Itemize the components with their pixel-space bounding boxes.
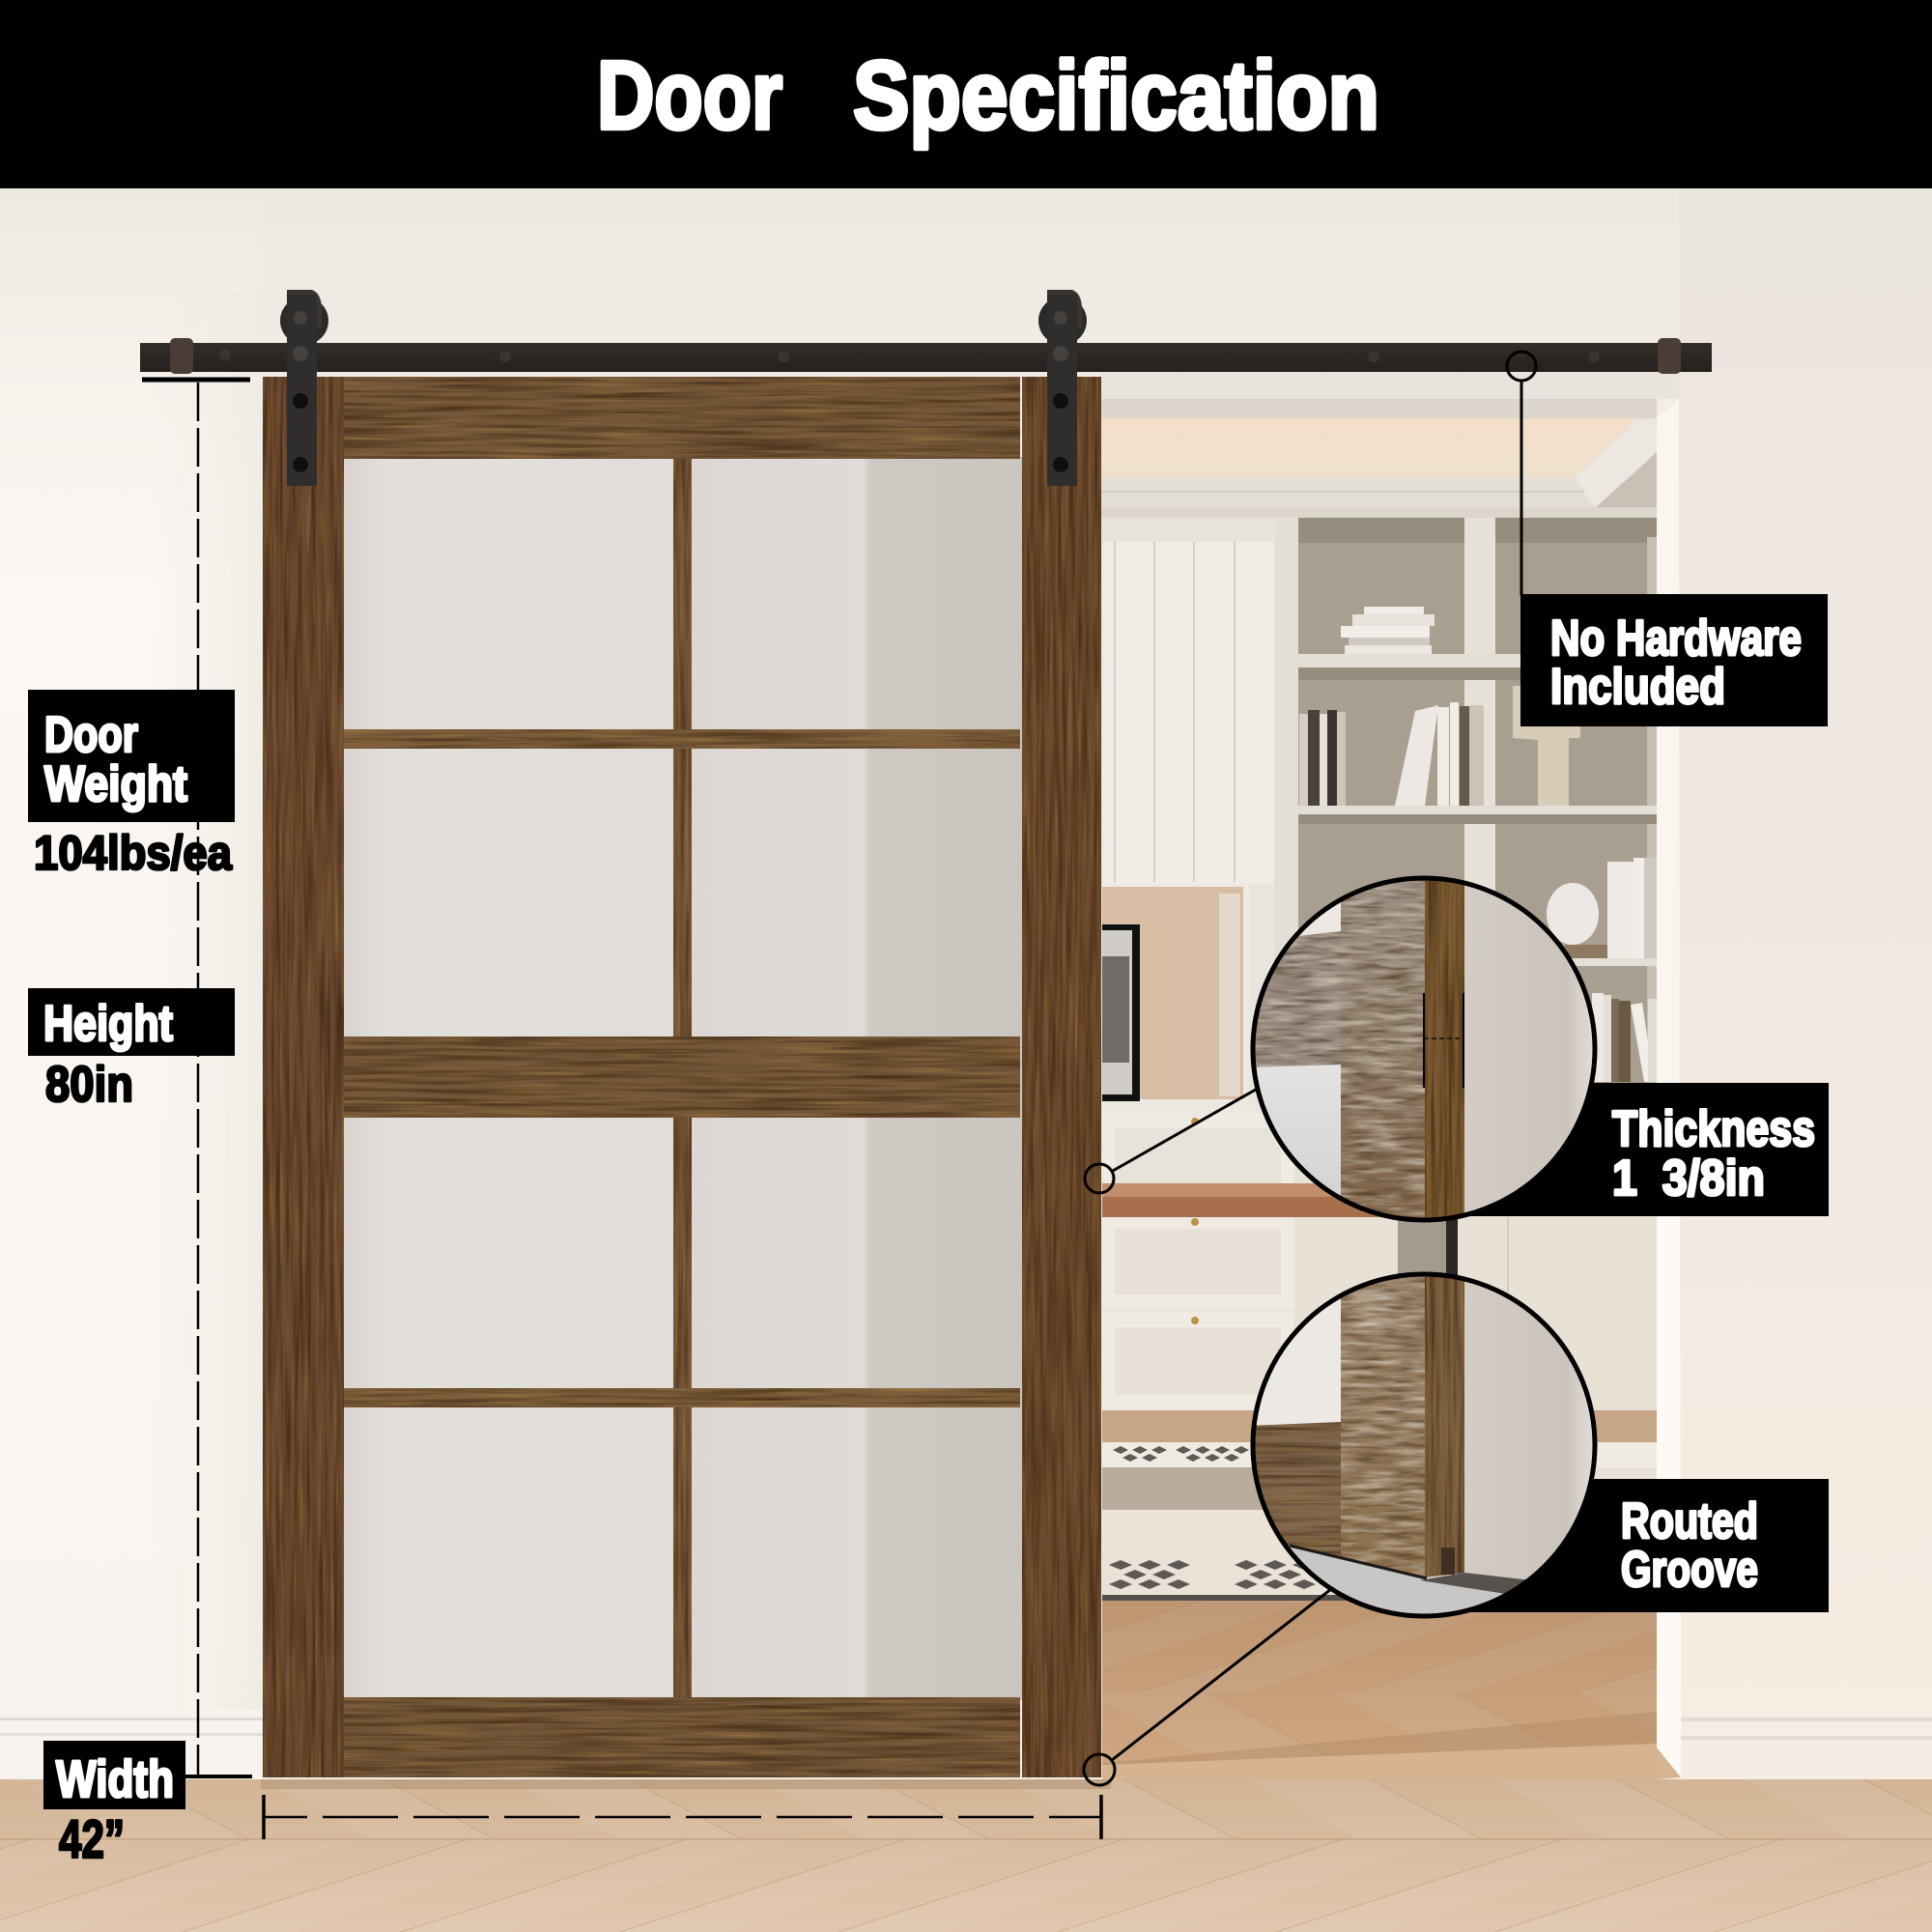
routed groove notch bbox=[1441, 1548, 1455, 1575]
glass panes bbox=[344, 457, 1022, 1700]
header bar bbox=[0, 0, 1932, 188]
opening reveal bbox=[1657, 399, 1681, 1779]
sliding rail hardware bbox=[140, 290, 1712, 486]
detail circle: routed groove bbox=[1246, 1265, 1604, 1623]
back floor foreground bbox=[1102, 1601, 1657, 1777]
right hanger bbox=[1038, 290, 1087, 486]
rail bolts bbox=[219, 349, 1600, 362]
label: height: Height bbox=[43, 996, 173, 1052]
crown moulding bbox=[1101, 478, 1594, 507]
value: width: 42” bbox=[59, 1808, 125, 1869]
label: no hardware included bbox=[1520, 594, 1828, 726]
label: routed groove bbox=[1468, 1479, 1829, 1612]
title bbox=[597, 42, 1379, 150]
thickness measure marks bbox=[1423, 993, 1425, 1088]
lit ceiling cove bbox=[1101, 418, 1637, 478]
cabinet drawers and desk bbox=[1102, 1101, 1295, 1115]
label: no hardware included: No Hardware bbox=[1550, 611, 1802, 667]
sculpture bbox=[1513, 686, 1580, 806]
room interior seen through opening bbox=[1101, 372, 1679, 1779]
label: no hardware included: Included bbox=[1550, 659, 1725, 715]
rug diamond clusters bbox=[1109, 1446, 1316, 1589]
bookcase bbox=[1274, 518, 1657, 1126]
label: thickness: 1 3/8in bbox=[1612, 1151, 1765, 1207]
label: thickness bbox=[1468, 1083, 1829, 1216]
left hanger bbox=[280, 290, 328, 486]
detail circle: thickness bbox=[1246, 869, 1604, 1227]
front floor bbox=[0, 1779, 1932, 1932]
beadboard wall bbox=[1102, 518, 1274, 884]
label: door weight: Weight bbox=[44, 756, 187, 812]
back floor bbox=[1102, 1410, 1657, 1443]
header casing bbox=[1101, 372, 1679, 399]
value: door weight: 104lbs/ea bbox=[34, 826, 233, 880]
label: routed groove: Groove bbox=[1621, 1542, 1758, 1598]
leader: thickness bbox=[1085, 1087, 1261, 1193]
title: Door bbox=[597, 42, 782, 150]
width dimension line bbox=[264, 1795, 1101, 1839]
label: door weight: Door bbox=[44, 707, 138, 763]
stiles bbox=[263, 377, 344, 1777]
label: height bbox=[28, 988, 235, 1056]
label: thickness: Thickness bbox=[1612, 1101, 1815, 1157]
height dimension line bbox=[142, 380, 252, 1776]
mullion and thin rails bbox=[673, 457, 692, 1703]
baseboards bbox=[0, 1710, 1932, 1779]
label: door weight bbox=[28, 690, 235, 822]
leader: no hardware bbox=[1507, 352, 1536, 595]
label: routed groove: Routed bbox=[1621, 1493, 1758, 1549]
framed art bbox=[1102, 882, 1249, 1104]
thick rails bbox=[344, 377, 1020, 459]
books and vase on lower shelf bbox=[1547, 858, 1657, 1082]
books bbox=[1299, 607, 1484, 806]
label: width: Width bbox=[56, 1750, 174, 1808]
value: height: 80in bbox=[45, 1057, 133, 1113]
stoppers bbox=[170, 338, 193, 374]
leader: routed groove bbox=[1084, 1589, 1331, 1785]
rug bbox=[1102, 1442, 1657, 1597]
barn door bbox=[263, 377, 1101, 1777]
title: Specification bbox=[853, 42, 1379, 150]
